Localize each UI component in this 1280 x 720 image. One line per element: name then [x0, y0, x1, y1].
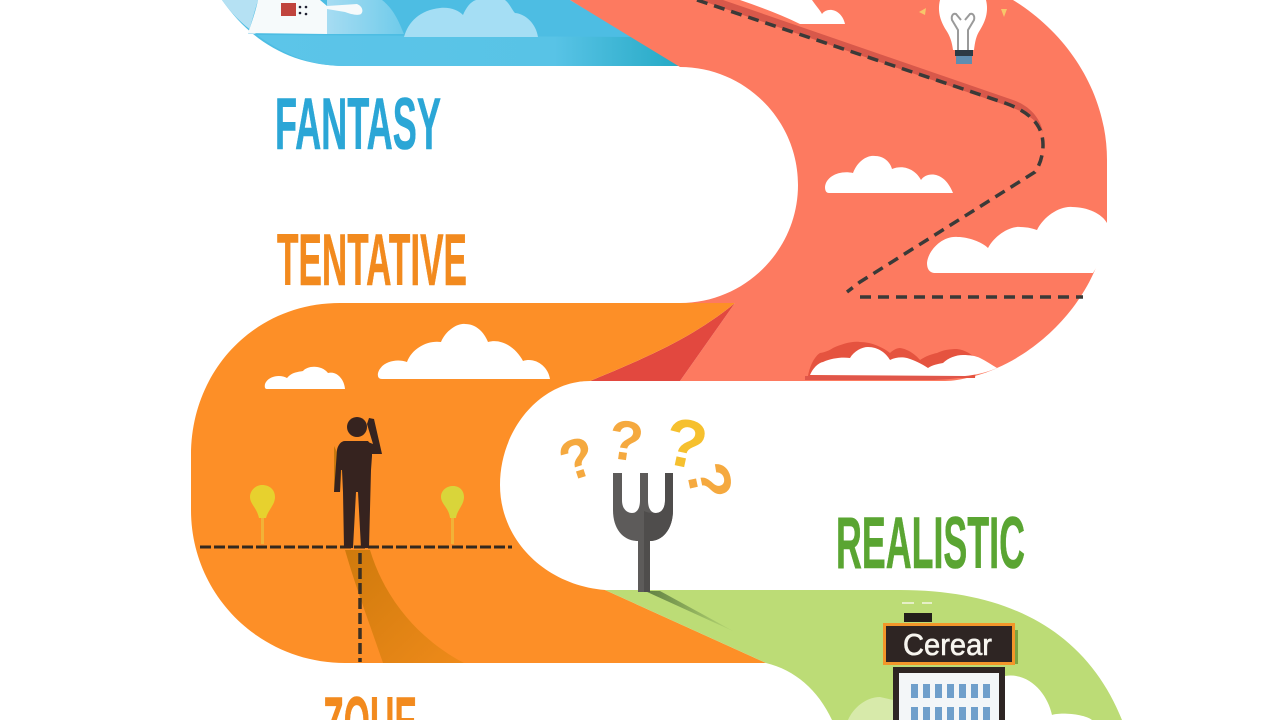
icon: orange large cloud — [378, 324, 550, 379]
icon: career building — [884, 602, 1018, 720]
icon: fork signpost — [613, 473, 673, 592]
icon: astronaut figure — [248, 0, 362, 34]
icon: left light cloud — [848, 697, 893, 720]
infographic road: REALISTIC — [836, 503, 1025, 584]
icon: person — [334, 417, 382, 548]
road: horizontal dashed line — [200, 546, 512, 548]
panel: tentative salmon band — [570, 0, 1107, 381]
icon: orange small cloud — [265, 367, 345, 389]
icon: blue cloud — [404, 0, 538, 37]
icon: bottom clouds with shadow — [805, 342, 997, 380]
icon: right bulb — [441, 486, 464, 544]
icon: person shadow — [345, 550, 464, 663]
icon: dark road edge — [700, 0, 1043, 132]
icon: question marks: ? — [551, 423, 603, 494]
road: dashed path — [697, 0, 1043, 292]
panel: orange band — [191, 303, 766, 663]
infographic road: TENTATIVE — [277, 220, 467, 301]
icon: question marks: ? — [673, 456, 746, 506]
icon: light bulb — [919, 0, 1007, 64]
icon: white cloud top — [740, 0, 845, 24]
icon: right white cloud — [1005, 676, 1092, 720]
icon: middle cloud — [825, 156, 953, 193]
infographic road: FANTASY — [275, 84, 441, 165]
panel: realistic green band — [605, 590, 1122, 720]
road: vertical dashed line — [358, 553, 362, 662]
icon: fork shadow — [645, 591, 735, 632]
icon: left bulb — [250, 485, 275, 544]
icon: question marks: ? — [657, 402, 714, 485]
icon: question marks: ? — [605, 407, 647, 474]
panel: dark fold — [590, 303, 735, 381]
panel: fantasy blue band — [222, 0, 682, 66]
icon: career building: Cerear — [903, 627, 992, 662]
icon: question marks — [551, 402, 746, 506]
road: dashed lower segment — [860, 295, 1083, 299]
icon: large right cloud — [927, 207, 1107, 273]
